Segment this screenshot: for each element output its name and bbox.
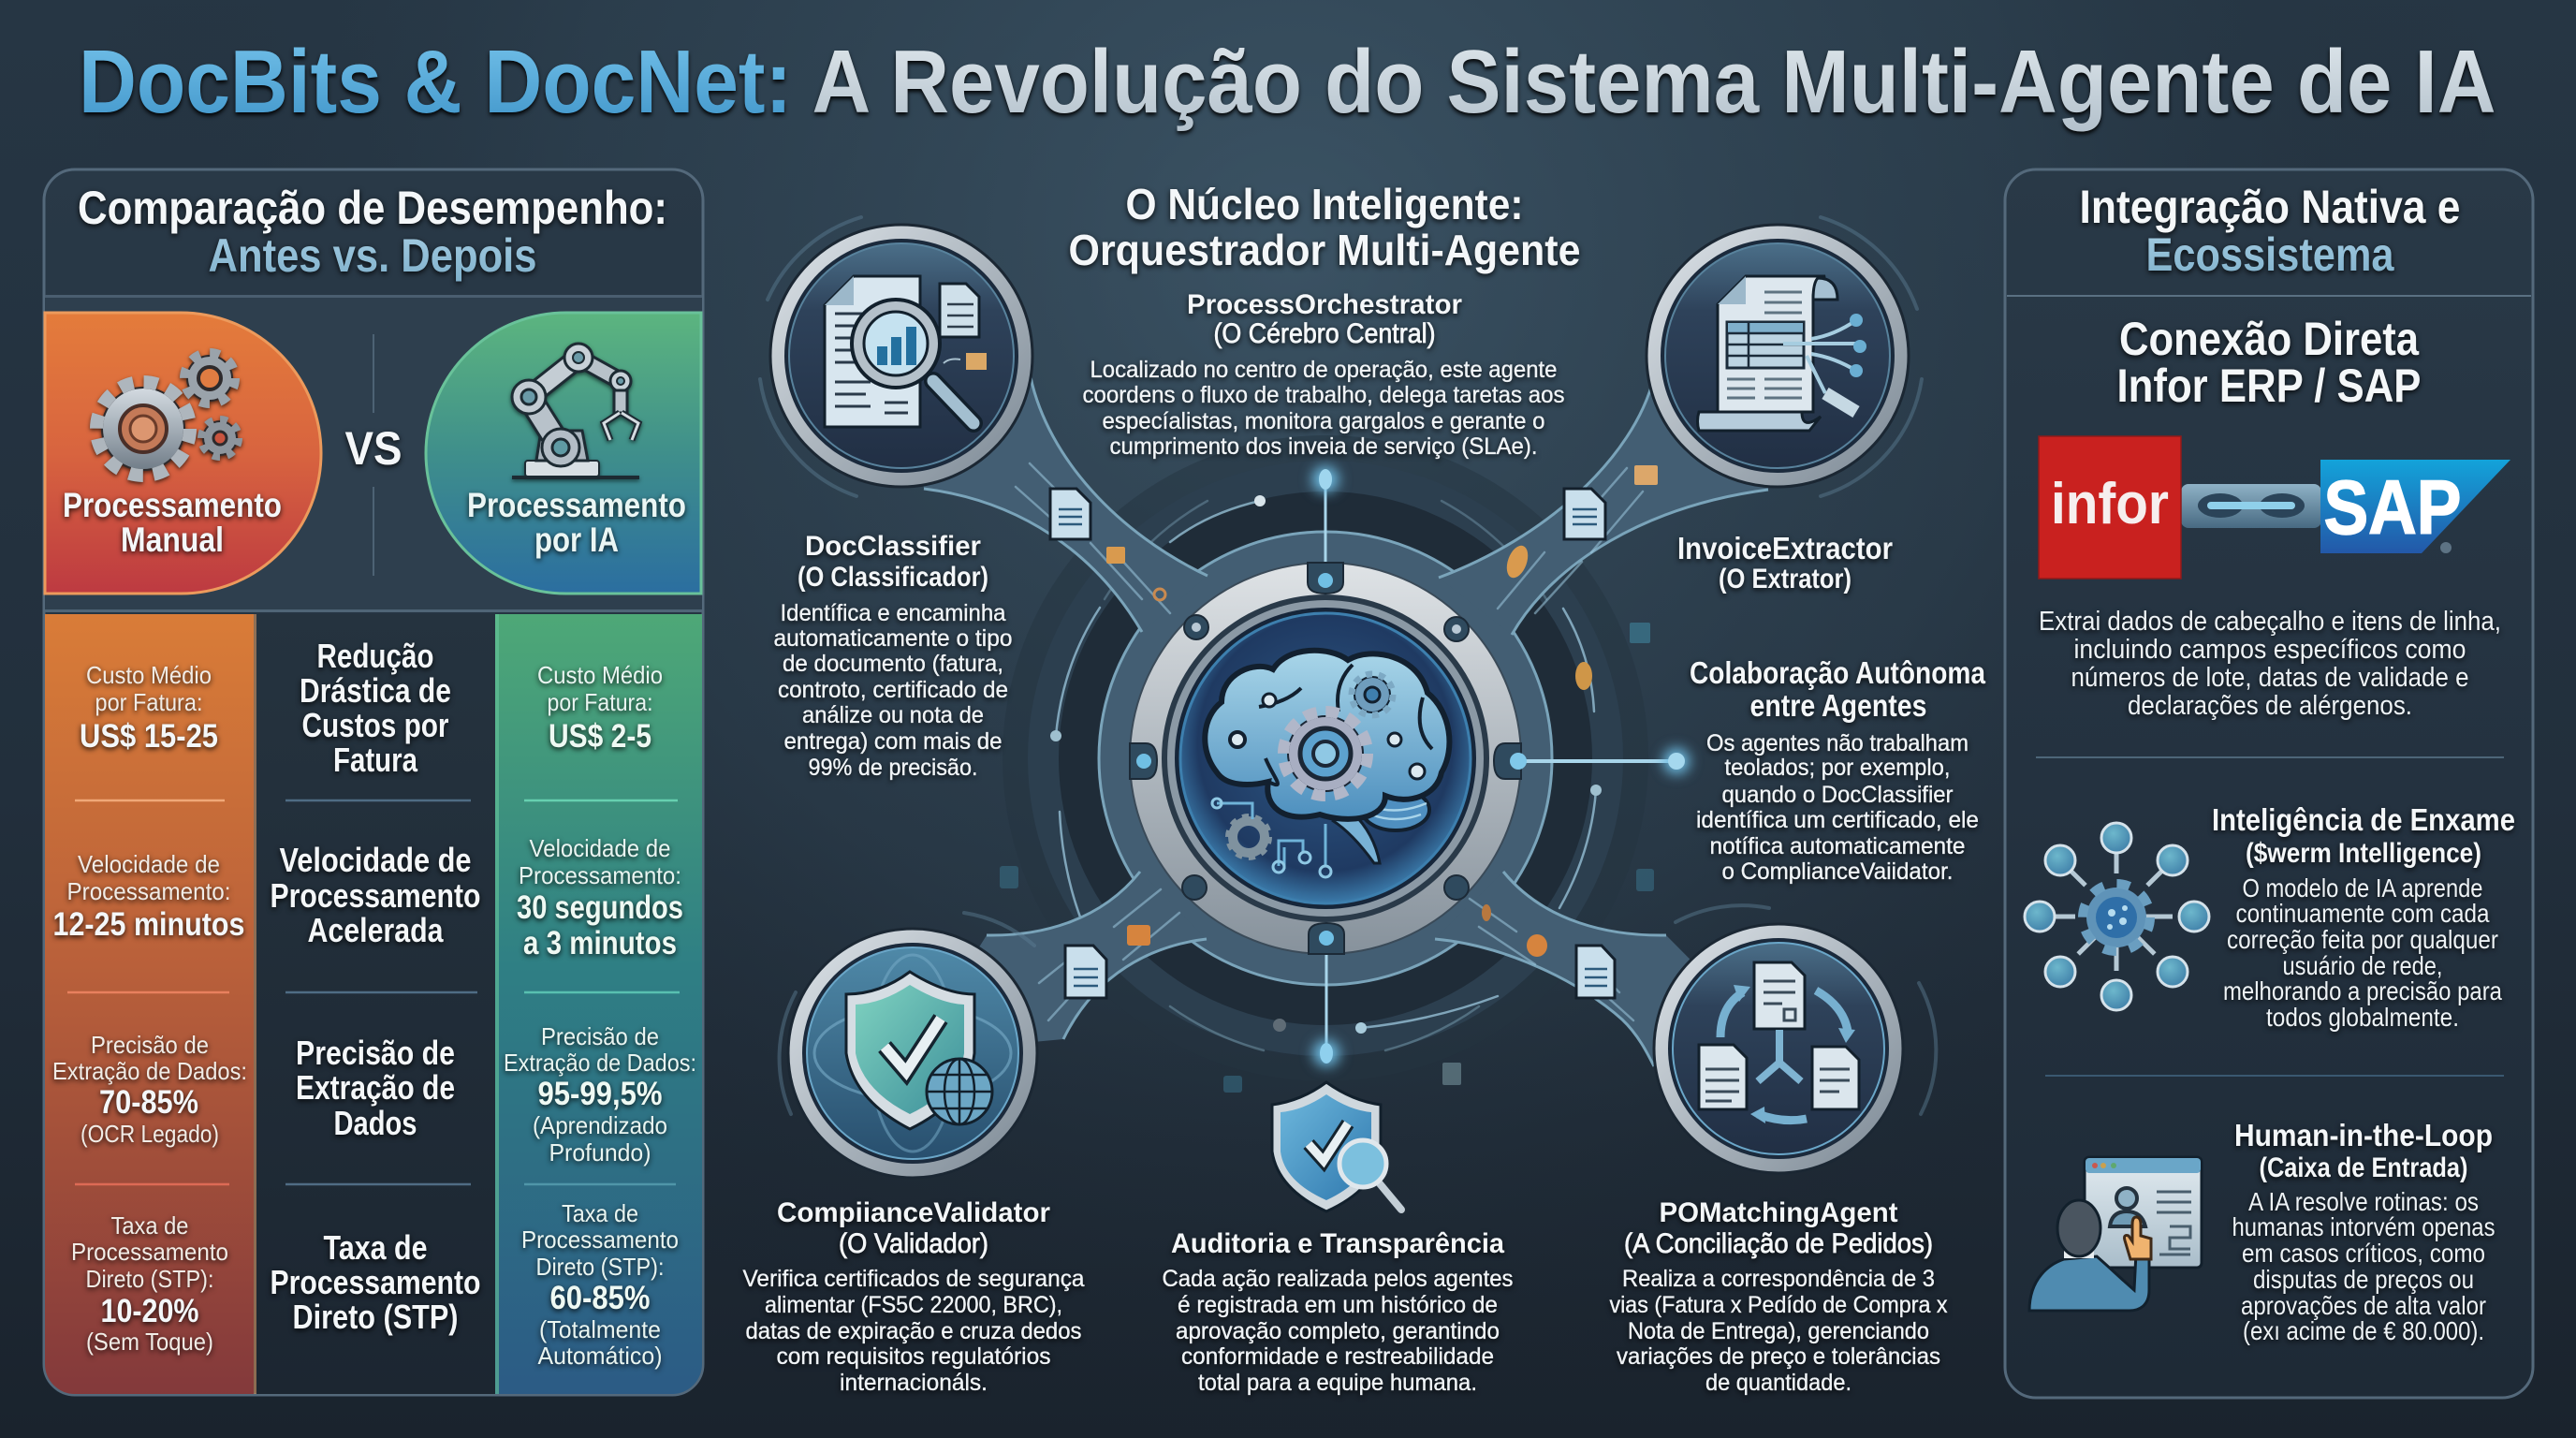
text: swarm intelligence: O modelo de IA aprende — [2243, 873, 2482, 902]
text: audit and transparency: aprovação completo, gerantindo — [1176, 1318, 1500, 1344]
text: ProcessOrchestrator: coordens o fluxo de trabalho, delega taretas aos — [1082, 382, 1565, 408]
text: ComplianceValidator: com requisitos regulatórios — [777, 1343, 1050, 1370]
logo link: Infor to SAP — [2039, 436, 2510, 579]
small teal data icons — [1000, 623, 1654, 1093]
text: swarm intelligence: continuamente com cada — [2235, 899, 2490, 928]
text: ProcessOrchestrator: (O Cérebro Central) — [1213, 318, 1436, 349]
concentric orbit rings — [1003, 435, 1648, 1081]
central orchestrator diagram — [743, 180, 1986, 1396]
text: autonomous collaboration: Os agentes não trabalham — [1706, 730, 1969, 756]
agent: DocClassifier icon — [760, 217, 1032, 496]
connector pins — [1312, 466, 1690, 1066]
column: metric names: Processamento — [270, 876, 481, 915]
orange data packets — [1106, 465, 1658, 957]
column: metric names: Custos por — [301, 706, 449, 744]
text: audit and transparency: Auditoria e Transparência — [1171, 1228, 1504, 1259]
text: audit and transparency: Cada ação realizada pelos agentes — [1163, 1266, 1513, 1292]
text: autonomous collaboration: Colaboração Autônoma — [1690, 655, 1986, 690]
subheading: direct connection: Conexão Direta — [2119, 313, 2420, 365]
column: metric names: Fatura — [333, 741, 418, 779]
column: manual values: Processamento: — [67, 877, 230, 905]
text: ProcessOrchestrator: ProcessOrchestrator — [1187, 289, 1462, 320]
text: ProcessOrchestrator: cumprimento dos inveia de serviço (SLAe). — [1110, 433, 1537, 460]
text: human in the loop: Human-in-the-Loop — [2234, 1118, 2493, 1152]
text: POMatchingAgent — [1610, 1197, 1948, 1396]
text: ProcessOrchestrator: Localizado no centro de operação, este agente — [1090, 357, 1558, 383]
integration panel heading: Integração Nativa e — [2080, 181, 2460, 233]
column: metric names: Direto (STP) — [292, 1298, 459, 1336]
column: AI values: Processamento: — [519, 861, 681, 889]
column: metric names: Taxa de — [324, 1228, 427, 1267]
text: DocClassifier: DocClassifier — [805, 531, 981, 562]
title — [79, 32, 2496, 132]
integration panel heading — [2080, 181, 2460, 281]
text: extraction description: Extrai dados de cabeçalho e itens de linha, — [2039, 607, 2501, 637]
text: InvoiceExtractor: (O Extrator) — [1719, 564, 1852, 594]
text: swarm intelligence: ($werm Intelligence) — [2246, 838, 2481, 869]
versus marker: VS — [344, 422, 402, 475]
text: extraction description: declarações de alérgenos. — [2128, 691, 2412, 721]
text: autonomous collaboration: o ComplianceVaiidator. — [1722, 858, 1953, 885]
column: manual values: Extração de Dados: — [52, 1057, 247, 1085]
column: AI values: US$ 2-5 — [549, 718, 651, 755]
text: audit and transparency: total para a equipe humana. — [1198, 1370, 1477, 1396]
text: DocClassifier: Identífica e encaminha — [781, 600, 1006, 626]
column: manual values — [52, 661, 247, 1356]
heading: intelligent core — [1069, 180, 1580, 274]
text: DocClassifier: 99% de precisão. — [809, 755, 977, 781]
column: AI values: (Aprendizado — [533, 1111, 667, 1139]
column: AI values: Velocidade de — [530, 834, 670, 862]
agent: InvoiceExtractor icon — [1647, 217, 1922, 496]
column: manual values: (Sem Toque) — [86, 1328, 213, 1356]
text: swarm intelligence: usuário de rede, — [2282, 951, 2443, 980]
column: manual values: 70-85% — [99, 1084, 198, 1121]
text: DocClassifier: de documento (fatura, — [783, 651, 1003, 677]
column: manual values: Precisão de — [91, 1031, 209, 1059]
text: autonomous collaboration: identífica um certificado, ele — [1696, 807, 1979, 833]
text: POMatchingAgent: (A Conciliação de Pedidos) — [1624, 1228, 1933, 1259]
column: AI values: Automático) — [537, 1342, 663, 1370]
column: AI values: (Totalmente — [539, 1315, 661, 1343]
column: AI values: Profundo) — [549, 1138, 651, 1167]
column: AI values: 60-85% — [550, 1280, 650, 1316]
column: AI values: por Fatura: — [547, 688, 653, 716]
text: InvoiceExtractor — [1677, 531, 1893, 594]
comparison panel heading — [78, 182, 667, 282]
column: metric names: Extração de — [296, 1068, 455, 1107]
column: AI values: Precisão de — [541, 1022, 659, 1050]
text: POMatchingAgent: POMatchingAgent — [1659, 1197, 1898, 1228]
column: metric names: Velocidade de — [279, 841, 472, 879]
connector bands to agents — [901, 356, 1778, 1066]
text: POMatchingAgent: de quantidade. — [1705, 1370, 1852, 1396]
icon: swarm network — [2025, 823, 2209, 1010]
text: audit and transparency: é registrada em um histórico de — [1178, 1292, 1498, 1318]
central metal hub — [1130, 563, 1527, 954]
text: ComplianceValidator: CompiianceValidator — [777, 1197, 1050, 1228]
column: metric names: Processamento — [270, 1263, 481, 1301]
icon: robot arm — [512, 344, 639, 477]
label: manual processing: Processamento — [63, 486, 282, 524]
text: swarm intelligence: Inteligência de Enxame — [2212, 802, 2515, 837]
column: AI values: Taxa de — [562, 1199, 638, 1227]
column: manual values: Direto (STP): — [86, 1265, 213, 1293]
text: DocClassifier: (O Classificador) — [798, 562, 988, 593]
text: POMatchingAgent: vias (Fatura x Pedído de Compra x — [1610, 1292, 1948, 1318]
heading: intelligent core: Orquestrador Multi-Agente — [1069, 226, 1580, 274]
text: extraction description: incluindo campos específicos como — [2074, 635, 2466, 665]
column: manual values: US$ 15-25 — [80, 718, 218, 755]
text: swarm intelligence: correção feita por qualquer — [2227, 925, 2498, 954]
column: manual values: Taxa de — [110, 1211, 189, 1240]
text: autonomous collaboration — [1690, 655, 1986, 885]
text: human in the loop: A IA resolve rotinas: os — [2248, 1187, 2479, 1216]
text: autonomous collaboration: teolados; por exemplo, — [1724, 755, 1951, 781]
AI processing badge — [426, 313, 701, 594]
text: extraction description: números de lote, datas de validade e — [2071, 663, 2469, 693]
text: human in the loop: (exı acime de € 80.000). — [2243, 1316, 2484, 1345]
text: audit and transparency: conformidade e restreabilidade — [1181, 1343, 1494, 1370]
text: DocClassifier: controto, certificado de — [778, 677, 1008, 703]
manual processing badge — [45, 313, 321, 594]
text: human in the loop: (Caixa de Entrada) — [2260, 1152, 2467, 1183]
agent: POMatchingAgent icon — [1654, 905, 1936, 1173]
label: manual processing: Manual — [121, 521, 224, 559]
column: AI values: Direto (STP): — [535, 1253, 665, 1281]
column: AI values: 30 segundos — [517, 889, 683, 926]
panel: native integration and ecosystem — [2005, 169, 2533, 1398]
text: swarm intelligence — [2212, 802, 2515, 1032]
logo link: Infor to SAP: infor — [2051, 472, 2169, 536]
text: autonomous collaboration: quando o DocClassifier — [1722, 782, 1953, 808]
subheading: direct connection: Infor ERP / SAP — [2117, 360, 2421, 412]
column: metric names: Precisão de — [296, 1034, 455, 1072]
column: metric names: Dados — [333, 1104, 417, 1142]
text: DocClassifier — [773, 531, 1013, 781]
column: manual values: Custo Médio — [86, 661, 212, 689]
text: autonomous collaboration: entre Agentes — [1750, 688, 1926, 723]
text: ComplianceValidator — [743, 1197, 1085, 1396]
text: POMatchingAgent: variações de preço e tolerâncias — [1617, 1343, 1940, 1370]
text: ComplianceValidator: (O Validador) — [839, 1228, 988, 1259]
text: ComplianceValidator: Verifica certificados de segurança — [743, 1266, 1085, 1292]
text: swarm intelligence: todos globalmente. — [2266, 1003, 2459, 1032]
column: AI values: Extração de Dados: — [504, 1049, 696, 1077]
title: DocBits & DocNet: — [79, 32, 792, 132]
text: human in the loop — [2232, 1118, 2496, 1345]
column: metric names: Drástica de — [300, 671, 451, 710]
comparison columns backgrounds — [45, 614, 702, 1396]
icon: audit shield — [1272, 1082, 1401, 1211]
heading: intelligent core: O Núcleo Inteligente: — [1125, 180, 1524, 228]
column: manual values: 10-20% — [101, 1293, 198, 1329]
text: human in the loop: aprovações de alta valor — [2241, 1291, 2486, 1320]
comparison panel heading: Comparação de Desempenho: — [78, 182, 667, 234]
text: swarm intelligence: melhorando a precisão para — [2223, 976, 2502, 1005]
column: metric names — [270, 637, 481, 1336]
small flowing documents — [1050, 489, 1615, 998]
column: manual values: por Fatura: — [95, 688, 202, 716]
column: metric names: Acelerada — [307, 911, 444, 949]
text: DocClassifier: entrega) com mais de — [784, 728, 1002, 755]
text: extraction description — [2039, 607, 2501, 721]
label: AI processing: por IA — [534, 521, 619, 559]
text: ComplianceValidator: alimentar (FS5C 22000, BRC), — [765, 1292, 1062, 1318]
icon: human in the loop — [2029, 1157, 2202, 1311]
column: AI values — [504, 661, 696, 1370]
text: audit and transparency — [1163, 1228, 1513, 1396]
label: manual processing — [63, 486, 282, 559]
column: AI values: 95-99,5% — [537, 1076, 663, 1112]
label: AI processing: Processamento — [467, 486, 686, 524]
text: ProcessOrchestrator — [1082, 289, 1565, 460]
column: AI values: Processamento — [521, 1225, 679, 1254]
data flow lines on bands — [1016, 463, 1643, 1020]
text: POMatchingAgent: Realiza a correspondência de 3 — [1622, 1266, 1935, 1292]
subheading: direct connection — [2117, 313, 2421, 412]
column: AI values: Custo Médio — [537, 661, 663, 689]
text: human in the loop: em casos críticos, como — [2242, 1239, 2485, 1268]
column: manual values: 12-25 minutos — [52, 906, 245, 943]
text: DocClassifier: análize ou nota de — [802, 702, 984, 728]
text: POMatchingAgent: Nota de Entrega), gerenciando — [1628, 1318, 1929, 1344]
text: ProcessOrchestrator: especíalistas, monitora gargalos e gerante o — [1103, 408, 1544, 434]
text: DocClassifier: automaticamente o tipo — [773, 625, 1013, 652]
icon: gears — [96, 353, 239, 476]
text: ComplianceValidator: datas de expiração e cruza dedos — [745, 1318, 1082, 1344]
panel: performance comparison — [44, 169, 703, 1396]
icon: brain with gears — [1205, 651, 1449, 877]
text: autonomous collaboration: notífica automaticamente — [1709, 833, 1966, 859]
text: human in the loop: humanas intorvém openas — [2232, 1212, 2496, 1241]
hub tabs — [1130, 563, 1521, 954]
text: InvoiceExtractor: InvoiceExtractor — [1677, 531, 1893, 565]
column: manual values: Processamento — [71, 1238, 228, 1266]
text: ComplianceValidator: internacionáls. — [840, 1370, 988, 1396]
column: manual values: (OCR Legado) — [80, 1120, 219, 1148]
text: human in the loop: disputas de preços ou — [2253, 1265, 2474, 1294]
logo link: Infor to SAP: SAP — [2323, 465, 2462, 550]
integration panel heading: Ecossistema — [2145, 228, 2395, 281]
column: manual values: Velocidade de — [78, 850, 220, 878]
label: AI processing — [467, 486, 686, 559]
column: metric names: Redução — [316, 637, 434, 675]
comparison panel heading: Antes vs. Depois — [208, 229, 537, 282]
agent: ComplianceValidator icon — [780, 913, 1037, 1178]
column: AI values: a 3 minutos — [523, 925, 677, 961]
